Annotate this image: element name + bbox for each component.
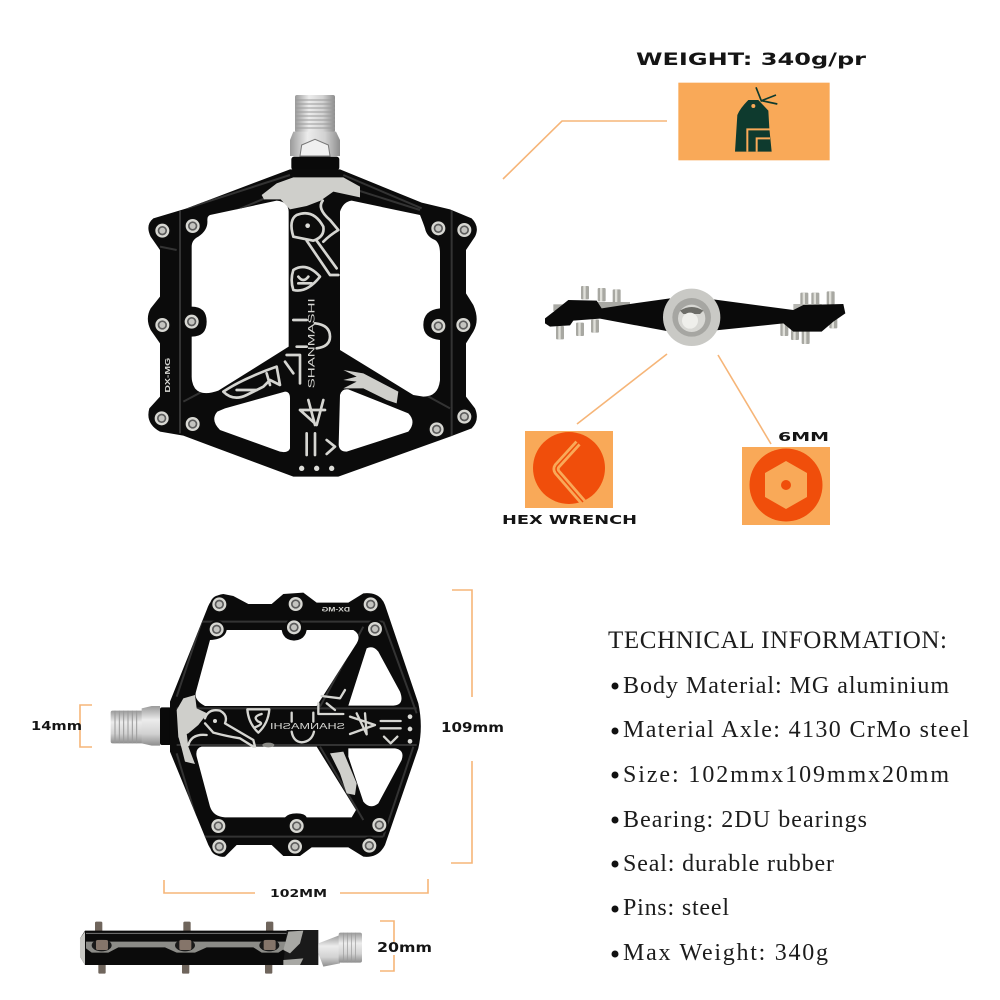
body sheen [160,175,452,437]
spec: seal: Seal: durable rubber [623,851,834,877]
spec: size: Size: 102mmx109mmx20mm [623,762,949,788]
spec: bearing: Bearing: 2DU bearings [623,807,867,833]
axle nut [142,706,160,746]
label: 6mm: 6MM [778,430,829,444]
model text: DX-MG [163,357,172,393]
panel: side view with hub [545,286,845,346]
dots [408,714,412,744]
logo text: SHANMASHI [306,298,316,388]
text block: technical information [608,627,969,966]
spec: max weight: Max Weight: 340g [623,940,828,966]
dimension: 109mm bracket [451,590,472,863]
silver graphic wing [343,370,398,403]
dimension: 102mm bracket [164,879,428,893]
silver graphic head [177,695,207,764]
line art [223,201,338,455]
spec: body material: Body Material: MG aluminium [623,673,949,699]
panel: pedal side profile [80,922,362,974]
grey boss [262,743,274,747]
hub [663,289,720,346]
callout: 6mm leader [718,355,771,444]
pedal body [170,593,421,857]
panel: bottom pedal front view [111,593,421,857]
callout: hex wrench leader [577,354,667,424]
icon: hex wrench [525,431,613,508]
silver graphic wing [330,752,357,795]
logo text: SHANMASHI [270,722,345,731]
heading: weight: WEIGHT: 340g/pr [636,50,867,70]
icon: 6mm hex [742,447,830,525]
axle thread [111,711,144,743]
hub dot [213,719,217,723]
pins and bolts [153,217,473,438]
pins and bolts [208,595,388,856]
side body [80,931,287,965]
silver graphic top [262,177,360,209]
pedal edge body [545,298,845,332]
spec: axle: Material Axle: 4130 CrMo steel [623,717,969,743]
bottom pedal artwork [177,690,401,795]
callout: weight leader line [503,121,667,179]
axle nut [290,132,340,156]
dimension label: 109mm: 109mm [441,721,504,736]
side pins [95,922,273,974]
body sheen [177,622,417,837]
dimension: 20mm bracket [380,921,394,971]
axle collar [291,157,339,170]
dimension label: 14mm: 14mm [31,719,82,733]
dimension: 14mm bracket [80,705,92,747]
line art [188,690,401,747]
model text: DX-MG [322,607,350,614]
dots [299,223,334,471]
heading: TECHNICAL INFORMATION: [608,627,947,654]
label: hex wrench: HEX WRENCH [502,513,637,527]
icon: weight tag [678,83,830,160]
spec: pins: Pins: steel [623,895,729,921]
axle thread [295,95,335,132]
pedal body [148,169,477,477]
pedal pins [553,286,837,344]
panel: top pedal front view [148,95,477,477]
side axle [283,930,362,967]
dimension label: 102mm: 102MM [270,887,327,900]
axle collar [160,707,171,745]
dimension label: 20mm: 20mm [377,941,432,956]
